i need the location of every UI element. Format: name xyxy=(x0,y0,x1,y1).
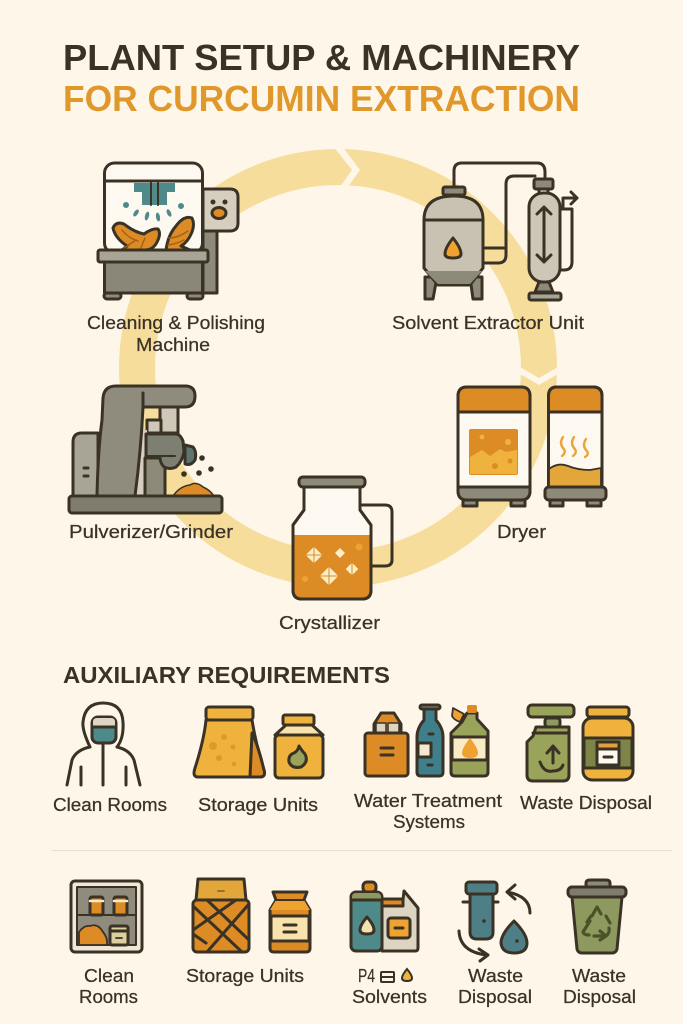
label: solvents xyxy=(352,966,427,1007)
label: dryer: Dryer xyxy=(497,522,546,542)
label: waste disposal middle xyxy=(458,966,532,1007)
icon: pulverizer grinder xyxy=(69,386,222,513)
icon: waste disposal filter and drop xyxy=(459,882,530,961)
label: water treatment systems: Systems xyxy=(393,812,465,832)
label: clean rooms: Clean Rooms xyxy=(53,795,167,815)
label: cleaning and polishing machine: Machine xyxy=(136,335,210,355)
label: clean rooms lower: Rooms xyxy=(79,987,138,1007)
icon: dryer xyxy=(458,387,606,506)
label: waste disposal: Waste Disposal xyxy=(520,793,652,813)
label: clean rooms lower xyxy=(79,966,138,1007)
label: waste disposal middle: Disposal xyxy=(458,987,532,1007)
icon: clean rooms shelf xyxy=(71,881,142,952)
label: waste disposal right: Disposal xyxy=(563,987,636,1007)
label: solvent extractor unit: Solvent Extractor Unit xyxy=(392,313,584,333)
label: water treatment systems xyxy=(354,791,502,832)
label: storage units: Storage Units xyxy=(198,795,318,815)
icon: solvent extractor unit xyxy=(424,163,577,300)
icon: cleaning and polishing machine xyxy=(98,163,238,299)
label: crystallizer: Crystallizer xyxy=(279,613,380,633)
label: storage units lower: Storage Units xyxy=(186,966,304,986)
icon: storage crate and jar xyxy=(193,879,310,952)
label: waste disposal right: Waste xyxy=(572,966,626,986)
icon: clean room suit xyxy=(67,703,140,785)
label: clean rooms lower: Clean xyxy=(84,966,134,986)
label: water treatment systems: Water Treatment xyxy=(354,791,502,811)
label: waste disposal middle: Waste xyxy=(468,966,523,986)
heading: auxiliary requirements: AUXILIARY REQUIREMENTS xyxy=(63,662,390,688)
label: cleaning and polishing machine: Cleaning & Polishing xyxy=(87,313,265,333)
label: cleaning and polishing machine xyxy=(87,313,265,355)
icon: water treatment containers xyxy=(365,705,488,776)
process cycle ring xyxy=(137,146,558,569)
title: PLANT SETUP & MACHINERY xyxy=(63,37,580,78)
title xyxy=(63,37,580,119)
icon: solvent containers xyxy=(351,882,418,951)
icon: waste disposal containers xyxy=(527,705,633,781)
label: solvents: Solvents xyxy=(352,987,427,1007)
icon: storage bag and jar xyxy=(194,707,323,778)
label: waste disposal right xyxy=(563,966,636,1007)
label: pulverizer grinder: Pulverizer/Grinder xyxy=(69,522,233,542)
label: solvents: P4 xyxy=(358,966,375,986)
icon: recycling bin xyxy=(568,880,626,953)
title: FOR CURCUMIN EXTRACTION xyxy=(63,78,580,119)
icon: crystallizer jug xyxy=(293,477,392,599)
